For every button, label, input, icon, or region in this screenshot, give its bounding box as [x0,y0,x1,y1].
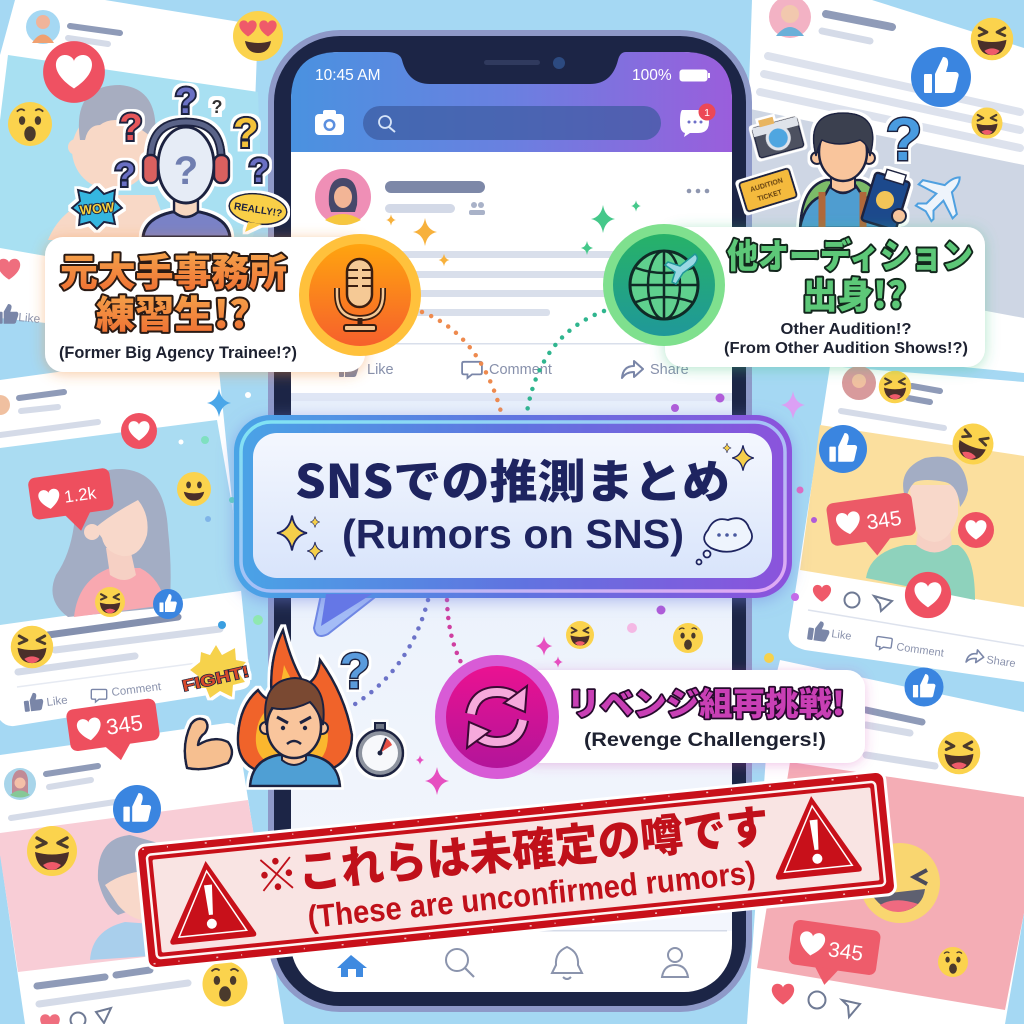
background card: middle right: Like [831,628,852,643]
heading: リベンジ組再挑戦: リベンジ組再挑戦! [567,679,845,725]
like badge: 345 bottom: 345 [827,938,865,966]
background card: top left [0,0,262,345]
sticker: airplane [907,160,977,230]
title: English: (Rumors on SNS) [342,511,684,557]
dotted connector: magenta [447,600,464,668]
post avatar [315,169,371,225]
question mark: ? [886,106,922,173]
background card: middle right [789,366,1024,682]
icon: flexed arm [185,719,232,769]
icon: warning triangle left [163,857,257,945]
icon: stopwatch [357,723,403,776]
question marks: ? [119,107,143,149]
icon: camera [315,110,344,135]
question marks: ? [212,97,222,117]
background card: top right [740,0,1024,373]
nav bar [296,930,727,979]
character: mystery trainee: ? [174,149,198,193]
sticker: camera [750,111,804,158]
background card: middle right: Share [986,654,1016,670]
phone notch [386,52,626,84]
icon: microphone [299,234,421,356]
more menu [687,189,709,193]
question marks [115,80,269,194]
character: mystery trainee [115,80,269,237]
status time: 10:45 AM [315,67,380,84]
character: fiery challenger [238,630,370,786]
status battery [632,67,710,84]
like badge: 1.2k: 1.2k [63,483,98,507]
background card: middle left [0,350,250,726]
background card: middle left: Comment [111,681,163,699]
heading: 他オーディション: 他オーディション [727,229,973,278]
panel: revenge challengers [435,655,865,779]
passport [861,166,912,230]
post actions: Like [367,362,394,378]
background card: bottom left [0,723,284,1024]
heading: 元大手事務所: 元大手事務所 [60,242,287,297]
stamp: Japanese text: ※これらは未確定の噂です [252,790,772,906]
icon: globe with plane [603,224,725,346]
question marks: ? [175,80,197,121]
sticker: ticket: AUDITION [749,177,784,194]
icon: thought cloud [696,518,752,564]
post text lines [318,251,720,344]
subtitle: (Former Big Agency Trainee!?) [59,344,297,362]
panel: other audition [603,224,985,367]
icon: refresh arrows [435,655,559,779]
phone [268,30,752,1012]
post actions [339,359,689,378]
sticker: WOW [72,187,122,229]
sticker: REALLY: REALLY!? [233,201,283,220]
dotted connector: purple [352,600,428,706]
background card: middle left: Like [46,694,68,709]
heading: 練習生: 練習生!? [96,284,250,339]
middle right actions [813,585,892,611]
search bar [363,106,661,140]
background card: bottom right [747,660,1024,1024]
dotted connector: green [527,311,604,412]
character: traveler [800,106,922,230]
sticker: REALLY [227,190,289,232]
title: Japanese: SNSでの推測まとめ [295,446,730,512]
like badge: 345 bottom [786,919,881,992]
title bubble [234,415,792,636]
stamp: English text: (These are unconfirmed rumors) [306,854,757,935]
sticker: ticket [739,168,797,212]
subtitle line 2: (From Other Audition Shows!?) [724,340,968,357]
icon: warning triangle right [768,792,862,880]
phone screen [291,52,732,992]
sticker: ticket: TICKET [757,189,784,203]
status battery: 100% [632,67,672,84]
icon: chat notification [680,104,716,137]
question marks: ? [249,152,269,190]
subtitle line 1: Other Audition!? [780,321,912,338]
subtitle: (Revenge Challengers!) [584,730,826,751]
sparkles on title [277,443,754,560]
background card: middle right: Comment [896,641,944,660]
background card: top left: Like [18,310,41,326]
question marks: ? [115,156,135,194]
like badge: 345 left: 345 [105,710,144,740]
question marks: ? [233,109,259,156]
like badge: 345 left [66,698,163,767]
icon: chat notification: 1 [704,107,710,119]
warning stamp [136,771,896,969]
post actions: Comment [489,362,552,378]
like badge: 1.2k [27,467,117,537]
like badge: 345 right [826,492,919,561]
dotted connector: orange [422,312,501,412]
sticker: WOW: WOW [79,199,116,218]
bottom right actions [772,984,860,1017]
sparkles and confetti [178,200,817,795]
like badge: 345 right: 345 [865,507,903,534]
heading: 出身: 出身!? [802,267,906,319]
post name lines [385,181,485,215]
sticker: FIGHT: FIGHT! [181,664,251,695]
sticker: FIGHT [181,645,251,698]
panel: former agency trainee [45,234,421,372]
question mark: ? [340,643,370,699]
post actions: Share [650,362,689,378]
